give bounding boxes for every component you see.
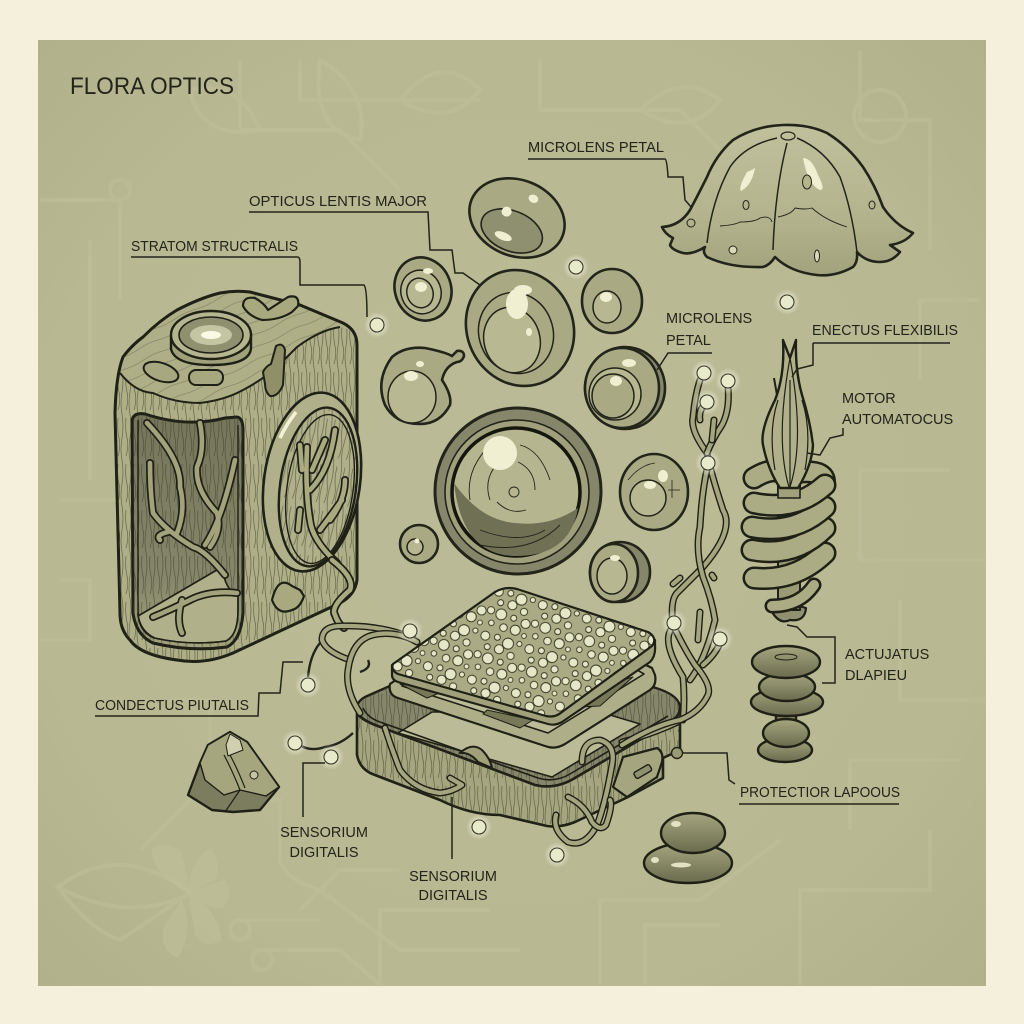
background flower: [152, 845, 229, 958]
lens: lower right: [590, 542, 650, 602]
lens: bulb with stem: [381, 348, 464, 424]
lens: top oval: [457, 164, 577, 272]
tray open floor: [398, 712, 640, 777]
tray front wall: [357, 708, 680, 826]
illustration: floating lenses: [381, 164, 688, 602]
lens: main large sphere: [435, 408, 601, 574]
illustration: pebbles: [644, 813, 732, 883]
lens: right middle: [620, 454, 688, 530]
top buttons: [141, 358, 223, 386]
tray interior back walls: [357, 684, 680, 786]
label: motor automatocus: AUTOMATOCUS: [842, 412, 953, 428]
vine from disc: [332, 560, 351, 628]
coil: [752, 471, 825, 606]
illustration: rock: [188, 732, 279, 812]
leader lines: [95, 159, 950, 859]
top lens: [171, 311, 251, 365]
tray right clasp: [613, 748, 662, 797]
stacked stones: actuator: [751, 646, 823, 762]
illustration: wooden camera body: [115, 291, 372, 661]
illustration: microlens dome petal: [662, 125, 913, 275]
title: FLORA OPTICS: [70, 73, 234, 100]
vines: right climbing: [622, 380, 728, 745]
lens: tiny bottom: [400, 525, 438, 563]
label: protectior lapoous: PROTECTIOR LAPOOUS: [740, 785, 900, 801]
microlens plate: [392, 640, 655, 725]
label: microlens petal right: PETAL: [666, 333, 711, 349]
illustration: tangled vines: [300, 380, 728, 843]
side clip: [263, 345, 285, 396]
label: sensorium digitalis bottom: DIGITALIS: [418, 888, 488, 904]
tray rear ring clasp: [460, 747, 492, 768]
label: actujatus dlapieu: DLAPIEU: [845, 668, 907, 684]
tray inner rim: [363, 708, 668, 780]
connector node: [672, 748, 682, 758]
lens: microlens petal right: [585, 347, 665, 429]
stem top: [778, 478, 800, 498]
illustration: flower bud on spring motor: [751, 340, 825, 762]
window tree: [147, 423, 237, 633]
label: condectus piutalis: CONDECTUS PIUTALIS: [95, 698, 249, 714]
label: microlens petal right: MICROLENS: [666, 311, 752, 327]
side disc with tree: [252, 386, 372, 578]
label: sensorium digitalis left: SENSORIUM: [280, 825, 368, 841]
label: opticus lentis major: OPTICUS LENTIS MAJOR: [249, 194, 427, 210]
middle frame: [390, 662, 655, 748]
window: [132, 414, 243, 649]
lens: opticus lentis major: [447, 252, 593, 404]
vines: left of tray: [300, 626, 417, 749]
label: actujatus dlapieu: ACTUJATUS: [845, 647, 929, 663]
bud: [762, 340, 813, 488]
label: microlens petal top: MICROLENS PETAL: [528, 140, 664, 156]
label: sensorium digitalis left: DIGITALIS: [289, 845, 359, 861]
lens: upper right small: [582, 269, 642, 333]
vines: tray right loops: [555, 722, 678, 843]
illustration: sensor tray with microlens plate: [357, 588, 680, 826]
top scroll handle: [243, 296, 298, 320]
vine: over tray front: [385, 728, 462, 793]
glowing sensor orbs: [282, 254, 800, 868]
label: motor automatocus: MOTOR: [842, 391, 896, 407]
label: enectus flexibilis: ENECTUS FLEXIBILIS: [812, 323, 958, 339]
label: stratom structralis: STRATOM STRUCTRALIS: [131, 239, 298, 255]
small knob: [272, 583, 304, 612]
lens: upper left small: [386, 249, 460, 329]
label: sensorium digitalis bottom: SENSORIUM: [409, 869, 497, 885]
camera shell: [115, 291, 357, 661]
